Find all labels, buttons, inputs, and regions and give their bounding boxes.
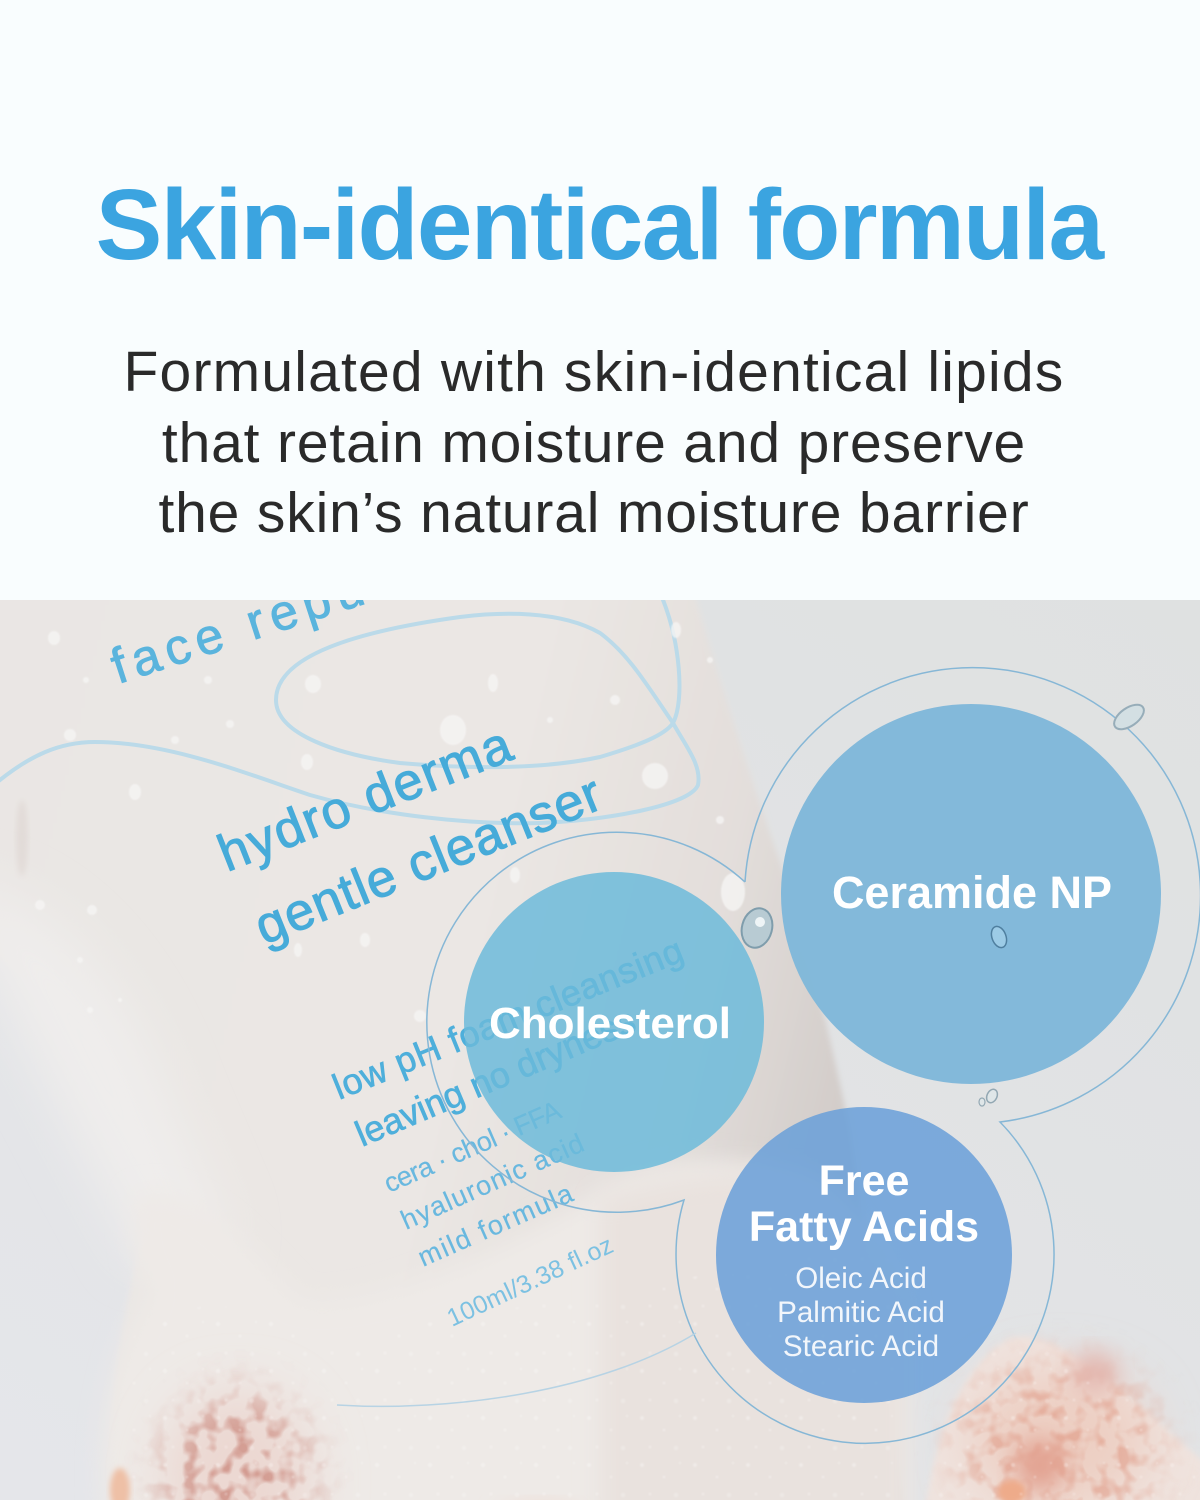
ingredient notes: mild formula	[413, 1178, 578, 1272]
pink skin showing through foam, left	[163, 1390, 313, 1500]
pink skin showing through foam, right	[970, 1370, 1150, 1500]
product description: low pH foam cleansing	[327, 929, 689, 1107]
ingredient bubble: Ceramide NP	[781, 704, 1161, 1084]
ingredient notes: 100ml/3.38 fl.oz	[443, 1231, 618, 1332]
subtitle text block: Formulated with skin-identical lipids	[124, 340, 1064, 404]
ingredient notes: cera · chol · FFA	[379, 1095, 566, 1198]
ingredient bubble: Cholesterol: Cholesterol	[489, 999, 731, 1048]
tube surface highlight	[0, 880, 230, 1260]
ingredient bubble: Free Fatty Acids	[716, 1107, 1012, 1403]
subtitle text block: that retain moisture and preserve	[162, 410, 1026, 474]
large water droplets on the bubble outline	[737, 700, 1148, 1106]
cleanser tube	[0, 540, 910, 1500]
icon: droplet on bubble	[989, 924, 1009, 950]
tube printed text	[104, 560, 689, 1332]
photo panel: cleanser tube in foam with ingredient bubbles	[0, 600, 1200, 1500]
ingredient bubble: Ceramide NP: Ceramide NP	[832, 867, 1112, 918]
subtitle text block	[124, 340, 1064, 545]
ingredient bubble: Free Fatty Acids: Free	[819, 1157, 909, 1205]
product name: hydro derma	[210, 716, 520, 883]
ingredient bubble: Free Fatty Acids: Oleic Acid	[795, 1262, 927, 1295]
outline connecting the ingredient bubbles	[427, 668, 1200, 1443]
product name: gentle cleanser	[247, 764, 610, 956]
ingredient bubble: Free Fatty Acids: Stearic Acid	[783, 1330, 939, 1363]
water droplets	[35, 622, 745, 1022]
product description: leaving no dryness	[349, 999, 641, 1154]
tube decorative line art	[0, 595, 699, 823]
ingredient bubble: Free Fatty Acids: Palmitic Acid	[777, 1296, 945, 1329]
ingredient notes: hyaluronic acid	[396, 1128, 588, 1235]
ingredient bubble: Cholesterol	[464, 872, 764, 1172]
subtitle text block: the skin’s natural moisture barrier	[158, 481, 1030, 545]
photo background	[0, 600, 1200, 1500]
ingredient notes	[379, 1095, 618, 1332]
faint lower tube curve	[337, 1333, 696, 1406]
foam bubble texture	[130, 1240, 905, 1500]
tube side fold	[16, 800, 28, 876]
foam	[103, 1161, 1200, 1500]
ingredient bubble: Free Fatty Acids: Fatty Acids	[749, 1203, 979, 1251]
title: Skin-identical formula	[96, 169, 1102, 281]
